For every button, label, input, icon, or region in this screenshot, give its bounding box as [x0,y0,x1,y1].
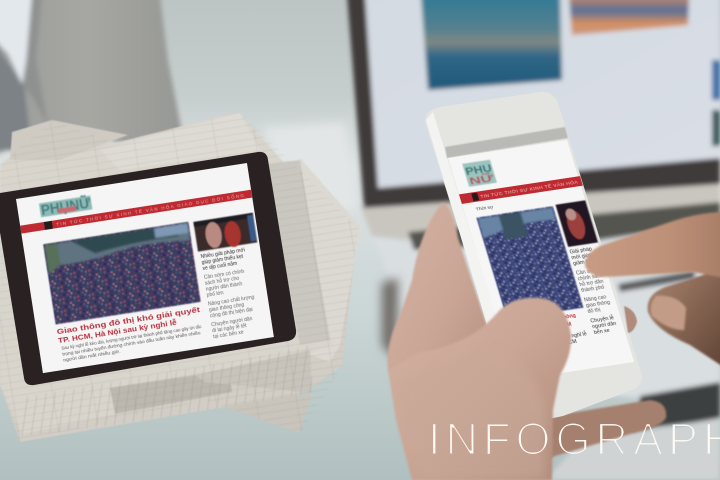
tablet side stories: người dân thành [205,281,243,293]
lower fingers under phone [530,400,666,470]
phone screen [448,140,636,380]
phone red menu bar: TIN TỨC THỜI SỰ KINH TẾ VĂN HÓA [479,178,579,200]
tablet logo: PHỤNỮ [40,194,92,219]
blurred paper on table [262,122,358,210]
phone side stories: thành phố [581,285,605,294]
soft highlight on palm [398,352,545,480]
laptop screen [365,0,720,188]
bottom sheet [205,382,312,433]
phone side stories: Chuyện lễ [590,314,615,324]
phone side stories: giao thông [585,300,611,309]
phone browser bar [445,127,568,158]
tablet side stories: Chuyện người dân [211,316,253,328]
blurred laptop [347,0,720,480]
top sheets [0,112,332,434]
left hand fingers behind phone [388,203,500,430]
smartphone [425,92,642,424]
laptop base [360,180,720,398]
tablet side stories: giúp giảm thiểu kẹt [201,253,244,266]
blue photo on screen [421,0,562,90]
tablet side stories: giao thông công [209,302,245,314]
tablet side photo [193,213,257,253]
tablet red menu bar [20,190,252,234]
phone side photo [555,200,598,247]
tablet body [0,152,296,385]
fingernail [651,296,686,330]
phone side stories: TP. HCM [550,322,572,330]
phone side stories [529,246,625,348]
index finger [585,212,720,278]
phone red menu bar [459,176,586,214]
orange photo on screen [569,0,689,35]
tablet article text [61,323,204,363]
phone body [425,92,642,424]
phone side stories: bến xe [593,328,611,336]
phone logo [462,160,497,188]
tablet screen [16,163,274,373]
dark shadow left of hand [382,278,398,360]
tablet side stories [200,247,260,340]
newsprint texture [0,112,358,442]
phone side stories: mới giúp [571,252,593,261]
tablet side stories: phố lớn [206,290,224,299]
phone side stories: hỗ trợ dân [579,278,604,288]
tablet article text: người dân mất nhiều giờ. [63,349,121,363]
tablet side stories: xe dịp cuối năm [202,261,238,272]
small finger tip right of phone [624,306,637,333]
phone side stories: chính sách [577,273,604,282]
phone red menu bar: Thời sự [475,204,495,213]
keyboard [408,202,720,250]
tablet headline: Giao thông đô thị khó giải quyết [56,305,201,336]
tablet headline [56,305,203,345]
newspaper stack [0,112,360,442]
tablet side stories: đi lại ngày lễ tết [212,322,248,334]
tablet side stories: tại các bến xe [213,330,244,340]
laptop lid bezel [347,0,720,208]
tablet crowd photo [43,222,201,324]
tablet article text: trọng tại nhiều tuyến đường chính vào đầu tuần này khiến nhiều [62,330,201,357]
laptop edge under finger [618,270,695,292]
left thumb over phone [388,298,571,480]
phone side stories: đô thị [587,307,601,315]
phone side stories: Giao thông [548,313,577,323]
phone crowd photo [476,206,583,319]
tablet side stories: Nâng cao chất lượng [208,295,255,308]
folded columns [110,370,232,414]
tablet side stories: sách hỗ trợ cho [204,275,240,287]
blurred businessman suit [0,0,182,155]
tablet red menu bar: TIN TỨC THỜI SỰ KINH TẾ VĂN HÓA GIÁO DỤC ĐỜI SỐNG [56,192,245,227]
phone side stories: Cần sớm có [575,267,605,277]
tablet side stories: cộng đô thị hiện đại [210,307,253,320]
tablet article text: Sau kỳ nghỉ lễ kéo dài, lượng người trở lại thành phố tăng cao gây ùn tắc [61,323,203,351]
phone side stories: Giải pháp [569,246,593,256]
tablet side stories: Cần sớm có chính [204,269,245,281]
phone logo: PHỤ [464,163,493,178]
tablet headline: TP. HCM, Hà Nội sau kỳ nghỉ lễ [57,318,177,345]
phone side stories: Sau kỳ nghỉ lễ [553,330,588,342]
tablet [0,152,296,385]
laptop front edge [640,382,720,428]
small thumbnails on screen [712,60,720,100]
tablet side stories: Nhiều giải pháp mới [200,247,245,260]
phone side stories: Nâng cao [584,294,607,303]
middle finger [648,268,720,368]
phone side stories: người dân [592,321,617,330]
phone logo: NỮ [468,171,496,187]
phone side stories: giảm kẹt [573,258,594,267]
right hand [585,212,720,368]
phone side stories: TP. HCM [555,339,578,348]
